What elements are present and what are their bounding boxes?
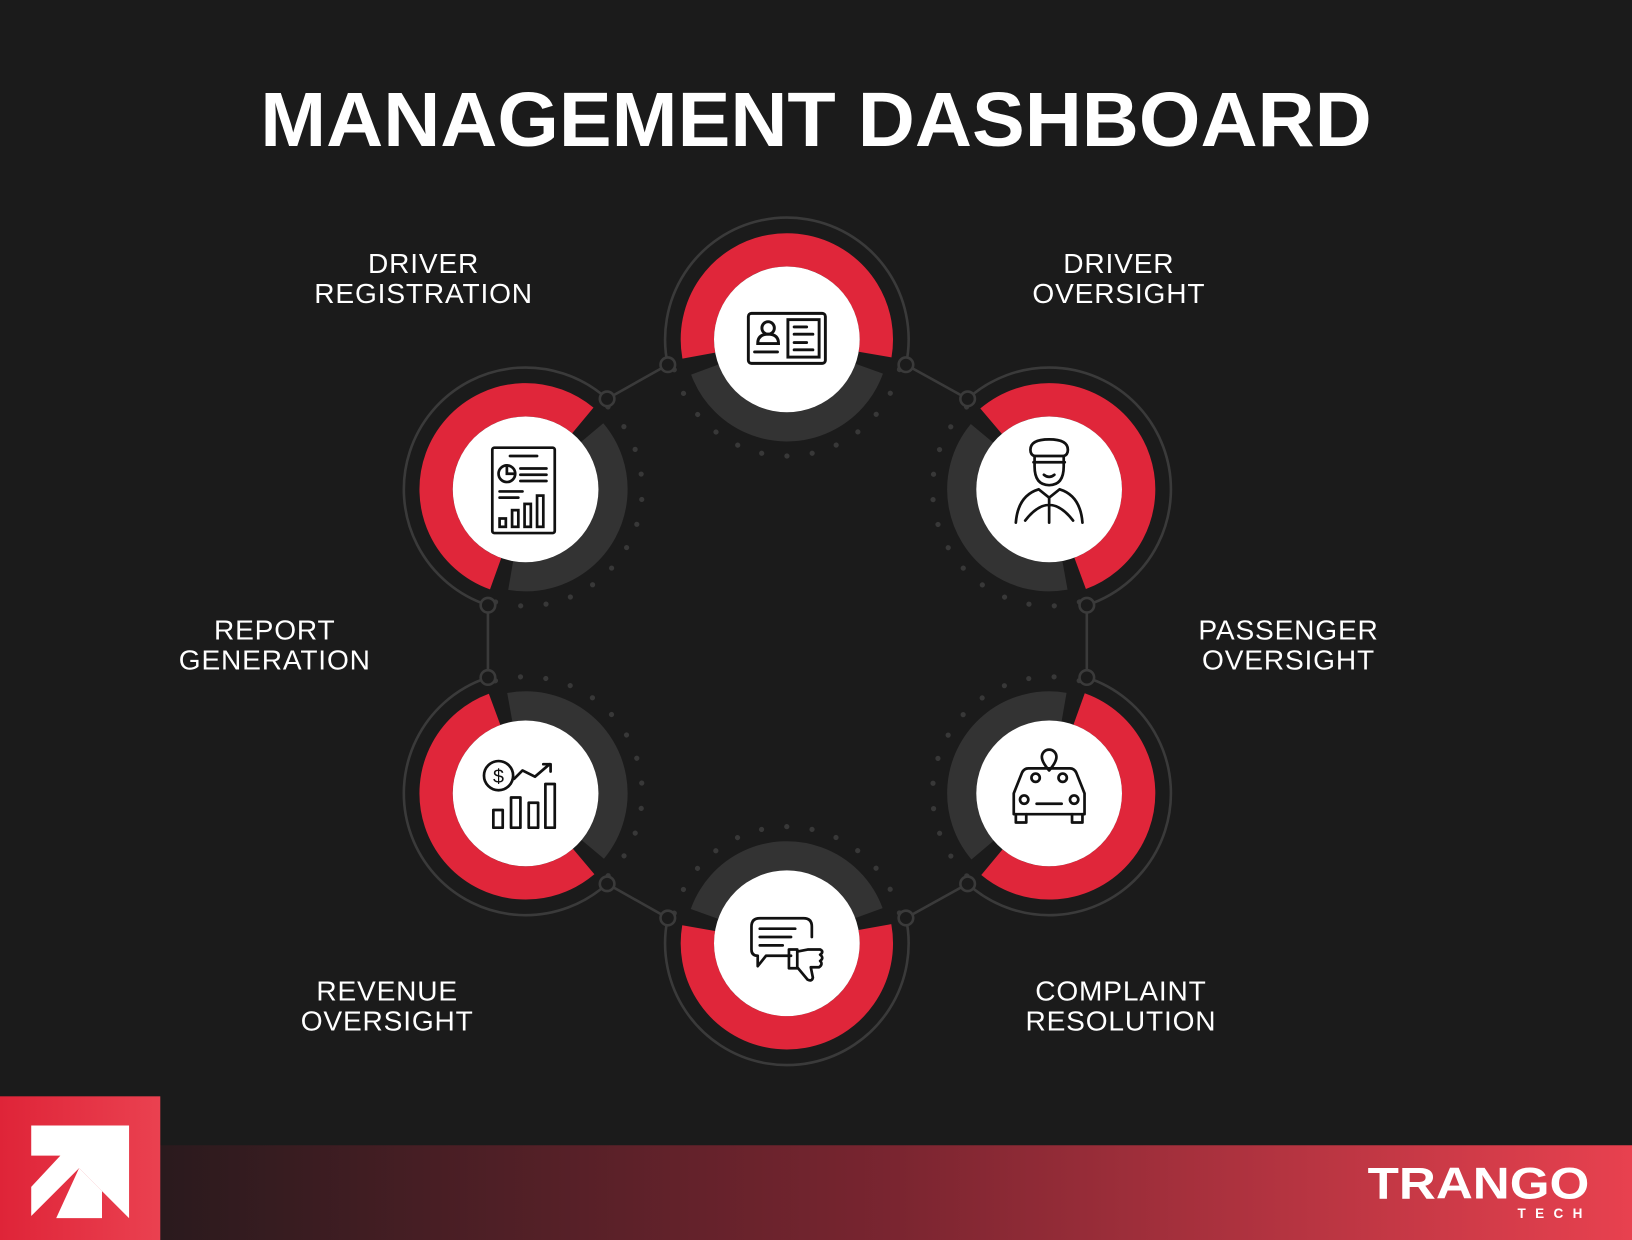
ring: report generation (upper left) bbox=[361, 324, 690, 654]
label: driver registration: REGISTRATION bbox=[314, 278, 533, 309]
icon: report bbox=[492, 448, 555, 533]
label: complaint resolution: RESOLUTION bbox=[1025, 1006, 1216, 1037]
icon: revenue chart: $ bbox=[493, 766, 504, 788]
label: revenue oversight: OVERSIGHT bbox=[301, 1006, 474, 1037]
icon: driver bbox=[1016, 439, 1082, 523]
label: driver oversight: DRIVER bbox=[1063, 248, 1174, 279]
icon: revenue chart bbox=[484, 761, 555, 828]
icon: complaint chat with thumbs down bbox=[751, 918, 822, 980]
label: complaint resolution: COMPLAINT bbox=[1035, 976, 1207, 1007]
label: passenger oversight: OVERSIGHT bbox=[1202, 644, 1375, 675]
label: driver registration: DRIVER bbox=[368, 248, 479, 279]
ring: revenue oversight (lower left) bbox=[354, 621, 698, 965]
title: MANAGEMENT DASHBOARD bbox=[260, 77, 1372, 163]
footer bar bbox=[160, 1145, 1632, 1240]
brand text: TRANGO bbox=[1368, 1158, 1589, 1208]
icon: id card bbox=[748, 313, 825, 363]
label: passenger oversight: PASSENGER bbox=[1198, 614, 1379, 645]
logo square bbox=[0, 1096, 160, 1240]
label: revenue oversight: REVENUE bbox=[316, 976, 458, 1007]
ring: complaint resolution (bottom) bbox=[642, 799, 931, 1088]
ring: driver registration (top) bbox=[642, 195, 931, 484]
label: report generation: REPORT bbox=[214, 614, 336, 645]
icon: car with passengers bbox=[1014, 750, 1085, 823]
brand text bbox=[1368, 1158, 1592, 1221]
ring: passenger oversight (lower right) bbox=[884, 628, 1214, 958]
label: report generation: GENERATION bbox=[179, 644, 371, 675]
ring: driver oversight (upper right) bbox=[877, 317, 1221, 661]
connector nodes bbox=[481, 357, 1094, 925]
brand text: TECH bbox=[1518, 1206, 1592, 1221]
connector lines bbox=[488, 365, 1087, 918]
label: driver oversight: OVERSIGHT bbox=[1032, 278, 1205, 309]
